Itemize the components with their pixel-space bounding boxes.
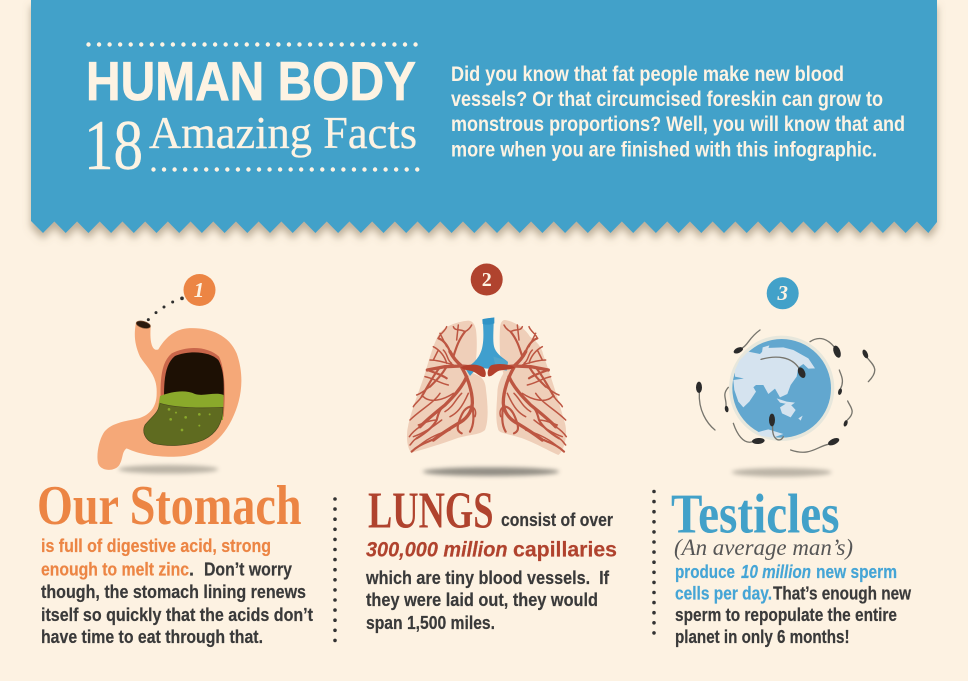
title: 18 — [84, 107, 143, 185]
testicles text block — [675, 562, 912, 647]
title: HUMAN BODY — [86, 50, 416, 112]
number badge 3 — [767, 277, 799, 309]
stomach text block: though, the stomach lining renews — [41, 582, 306, 602]
testicles text block: produce — [675, 562, 735, 582]
testicles text block: 10 million — [741, 562, 811, 582]
sperm heads — [696, 345, 869, 447]
testicles text block: That’s enough new — [773, 584, 912, 604]
icon: stomach — [97, 296, 241, 474]
icon: globe with sperm — [696, 330, 875, 477]
number badge 2: 2 — [482, 269, 492, 291]
lungs text block: span 1,500 miles. — [366, 613, 495, 633]
testicles text block: cells per day. — [675, 584, 772, 604]
stomach text block: is full of digestive acid, strong — [41, 536, 271, 556]
lungs text block: capillaries — [513, 538, 617, 562]
title: Amazing Facts — [149, 107, 417, 158]
number badge 2 — [471, 264, 503, 296]
title — [84, 50, 417, 185]
testicles text block: sperm to repopulate the entire — [675, 605, 897, 625]
banner ribbon with zigzag edge — [31, 0, 937, 233]
heading: Testicles: Testicles — [671, 484, 840, 546]
panel: header banner — [31, 0, 937, 233]
stomach text block: enough to melt zinc — [41, 560, 189, 580]
intro text — [451, 63, 905, 162]
lungs text block — [365, 510, 617, 633]
intro text: vessels? Or that circumcised foreskin can grow to — [451, 88, 883, 111]
right bronchial tree — [499, 325, 566, 452]
stomach text block — [41, 536, 313, 647]
number badge 1 — [184, 274, 216, 306]
left bronchial tree — [409, 325, 477, 452]
stomach text block: itself so quickly that the acids don’t — [41, 605, 313, 625]
panel: stomach — [37, 274, 313, 647]
testicles text block: new sperm — [816, 562, 897, 582]
stomach text block: have time to eat through that. — [41, 627, 263, 647]
lungs text block: consist of over — [501, 510, 613, 530]
subheading: (An average man’s) — [674, 535, 853, 560]
heading: Our Stomach: Our Stomach — [37, 475, 302, 537]
heading: LUNGS: LUNGS — [368, 482, 494, 540]
lungs text block: they were laid out, they would — [366, 590, 598, 610]
icon: lungs — [407, 317, 566, 476]
intro text: Did you know that fat people make new blood — [451, 63, 844, 86]
testicles text block: planet in only 6 months! — [675, 627, 850, 647]
stomach text block: Don’t worry — [204, 560, 292, 580]
panel: lungs — [365, 264, 617, 633]
number badge 1: 1 — [194, 278, 204, 302]
intro text: monstrous proportions? Well, you will know that and — [451, 113, 905, 136]
stomach text block: . — [189, 560, 194, 580]
lungs text block: 300,000 million — [366, 538, 508, 562]
sperm tails — [699, 330, 875, 452]
panel: testicles — [671, 277, 912, 647]
lungs text block: which are tiny blood vessels. If — [365, 568, 610, 588]
number badge 3: 3 — [776, 281, 788, 305]
intro text: more when you are finished with this infographic. — [451, 138, 877, 162]
